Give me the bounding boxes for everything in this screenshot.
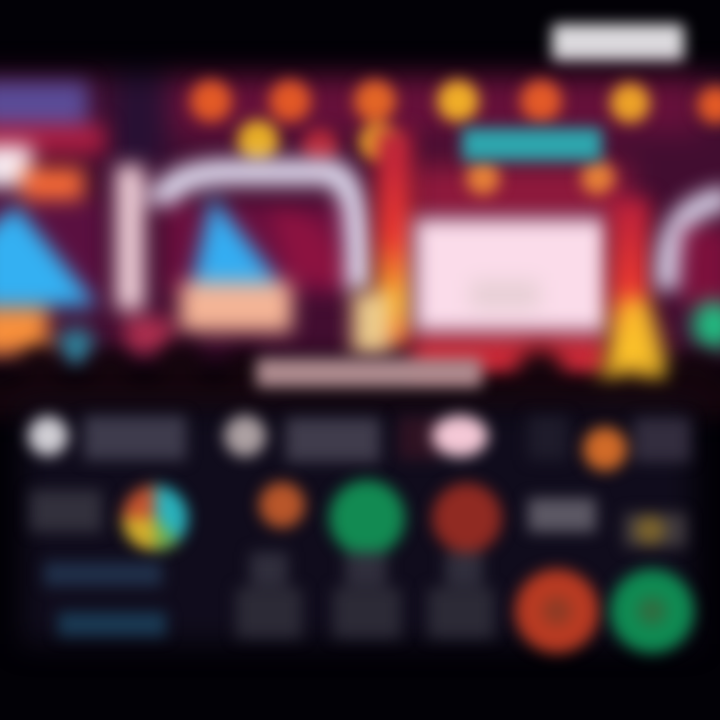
dashboard background (22, 408, 694, 644)
stage lights (190, 80, 720, 195)
right column (596, 198, 678, 396)
left panel (0, 82, 105, 364)
text block left (30, 490, 102, 532)
stage sign (462, 128, 602, 161)
stat card 1 (28, 416, 186, 460)
audience silhouettes (0, 342, 720, 418)
donut red (428, 483, 502, 638)
stat card 3 (398, 415, 568, 460)
donut green (329, 480, 405, 638)
center panel arch (116, 165, 358, 352)
gauge red (515, 569, 599, 653)
bar column 1 (236, 482, 305, 638)
main screen (412, 218, 608, 378)
left red column (352, 130, 412, 354)
right text blocks (528, 498, 686, 547)
pie chart (122, 485, 188, 551)
top right logo badge (552, 24, 684, 62)
title (256, 358, 482, 388)
gauge green (610, 569, 694, 653)
stat card 4 (583, 418, 690, 471)
blue text rows (44, 562, 166, 636)
right arch (667, 198, 720, 349)
stat card 2 (224, 415, 380, 462)
stage backdrop (0, 74, 720, 359)
